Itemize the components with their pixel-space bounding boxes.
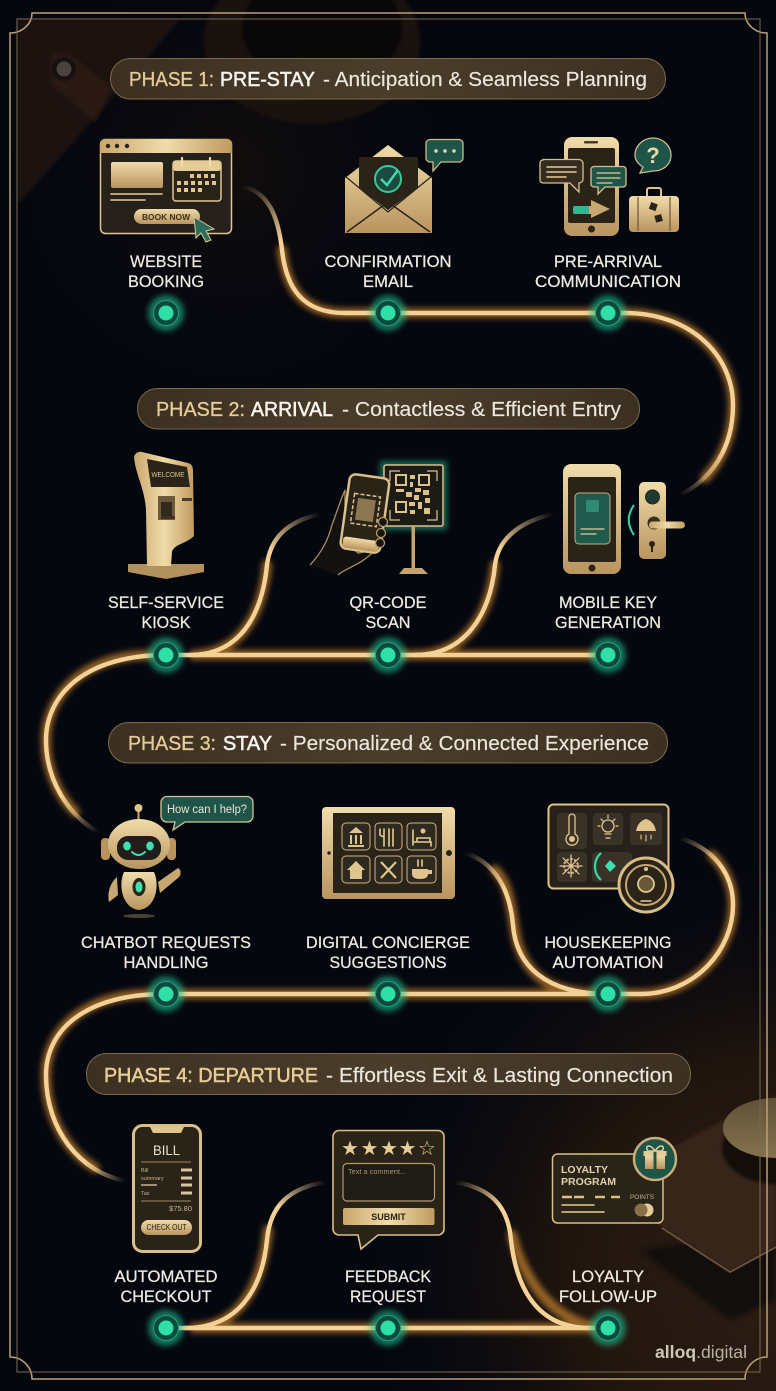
label: self-service kiosk: SELF-SERVICE bbox=[108, 594, 224, 612]
icon: qr-code scan bbox=[310, 461, 447, 575]
icon: feedback request: SUBMIT bbox=[371, 1212, 406, 1222]
label: mobile key generation line 2: GENERATION bbox=[555, 614, 661, 632]
label: qr-code scan line 2: SCAN bbox=[366, 614, 410, 632]
label: confirmation email: CONFIRMATION bbox=[324, 253, 452, 271]
icon: digital concierge tablet bbox=[322, 807, 455, 899]
phase 1 heading bbox=[110, 58, 666, 99]
icon: feedback request: Text a comment... bbox=[348, 1167, 406, 1176]
phase 1 heading: PRE-STAY bbox=[220, 69, 315, 91]
label: housekeeping automation line 2: AUTOMATION bbox=[552, 954, 664, 972]
label: confirmation email line 2: EMAIL bbox=[363, 273, 413, 291]
label: chatbot requests handling: CHATBOT REQUESTS bbox=[81, 934, 251, 952]
icon: automated checkout: $75.80 bbox=[169, 1204, 192, 1213]
timeline nodes bbox=[148, 295, 626, 1346]
phase 3 heading: STAY bbox=[223, 733, 272, 755]
icon: feedback request: ☆ bbox=[418, 1136, 436, 1160]
icon: automated checkout: Bill bbox=[141, 1168, 148, 1174]
phase 2 heading: PHASE 2: bbox=[156, 399, 245, 421]
label: digital concierge suggestions line 2: SUGGESTIONS bbox=[330, 954, 446, 972]
phase 1 heading: PHASE 1: bbox=[129, 69, 214, 91]
icon: loyalty follow-up: LOYALTY bbox=[561, 1164, 608, 1176]
icon: automated checkout: summary bbox=[141, 1176, 164, 1182]
label: housekeeping automation: HOUSEKEEPING bbox=[544, 934, 672, 952]
icon: feedback request: ★ bbox=[341, 1136, 359, 1160]
phase 2 heading: - Contactless & Efficient Entry bbox=[342, 399, 621, 421]
icon: self-service kiosk: WELCOME bbox=[152, 470, 184, 479]
icon: automated checkout: BILL bbox=[153, 1142, 180, 1158]
phase 3 heading bbox=[108, 722, 668, 763]
phase 3 heading: PHASE 3: bbox=[128, 733, 216, 755]
icon: pre-arrival communication: ? bbox=[646, 143, 660, 168]
icon: mobile key generation bbox=[563, 464, 685, 574]
icon: feedback request: ★ bbox=[399, 1136, 416, 1160]
phase 4 heading bbox=[86, 1054, 690, 1094]
journey path: phase 1 bbox=[242, 186, 733, 495]
label: feedback request line 2: REQUEST bbox=[350, 1288, 426, 1306]
icon: confirmation email bbox=[345, 140, 463, 233]
journey path: phase 3 bbox=[46, 838, 733, 1181]
icon: housekeeping automation bbox=[548, 804, 673, 912]
label: digital concierge suggestions: DIGITAL CONCIERGE bbox=[306, 934, 470, 952]
icon: chatbot: How can I help? bbox=[167, 804, 247, 816]
label: website booking: WEBSITE bbox=[130, 253, 202, 271]
label: automated checkout: AUTOMATED bbox=[114, 1268, 218, 1286]
label: loyalty follow-up line 2: FOLLOW-UP bbox=[559, 1288, 657, 1306]
phase 3 heading: - Personalized & Connected Experience bbox=[280, 733, 649, 755]
icon: feedback request: ★ bbox=[380, 1136, 398, 1160]
label: pre-arrival communication: PRE-ARRIVAL bbox=[554, 253, 662, 271]
phase 4 heading: - Effortless Exit & Lasting Connection bbox=[326, 1065, 673, 1087]
label: self-service kiosk line 2: KIOSK bbox=[142, 614, 190, 632]
label: qr-code scan: QR-CODE bbox=[350, 594, 426, 612]
label: pre-arrival communication line 2: COMMUNICATION bbox=[535, 273, 681, 291]
label: mobile key generation: MOBILE KEY bbox=[559, 594, 657, 612]
icon: website booking: BOOK NOW bbox=[142, 212, 191, 222]
label: chatbot requests handling line 2: HANDLING bbox=[124, 954, 208, 972]
phase 2 heading: ARRIVAL bbox=[251, 399, 333, 421]
journey path: phase 2 bbox=[46, 514, 608, 832]
phase 4 heading: PHASE 4: DEPARTURE bbox=[104, 1065, 318, 1087]
icon: website booking bbox=[100, 139, 232, 242]
icon: automated checkout: Tax bbox=[141, 1191, 150, 1197]
label: automated checkout line 2: CHECKOUT bbox=[120, 1288, 212, 1306]
label: website booking line 2: BOOKING bbox=[128, 273, 204, 291]
phase 1 heading: - Anticipation & Seamless Planning bbox=[323, 69, 647, 91]
label: loyalty follow-up: LOYALTY bbox=[572, 1268, 644, 1286]
icon: loyalty follow-up bbox=[552, 1138, 676, 1223]
label: feedback request: FEEDBACK bbox=[345, 1268, 431, 1286]
watermark: alloq.digital bbox=[655, 1342, 747, 1362]
icon: feedback request bbox=[333, 1130, 444, 1249]
icon: automated checkout bbox=[134, 1126, 200, 1252]
icon: automated checkout: CHECK OUT bbox=[146, 1223, 187, 1232]
phase 2 heading bbox=[138, 388, 640, 429]
icon: self-service kiosk bbox=[128, 452, 204, 579]
journey path: phase 4 bbox=[166, 1182, 608, 1328]
icon: pre-arrival communication bbox=[540, 137, 679, 236]
icon: chatbot bbox=[101, 796, 253, 918]
icon: feedback request: ★ bbox=[361, 1136, 378, 1160]
icon: loyalty follow-up: PROGRAM bbox=[561, 1176, 616, 1188]
icon: loyalty follow-up: POINTS bbox=[630, 1194, 655, 1201]
